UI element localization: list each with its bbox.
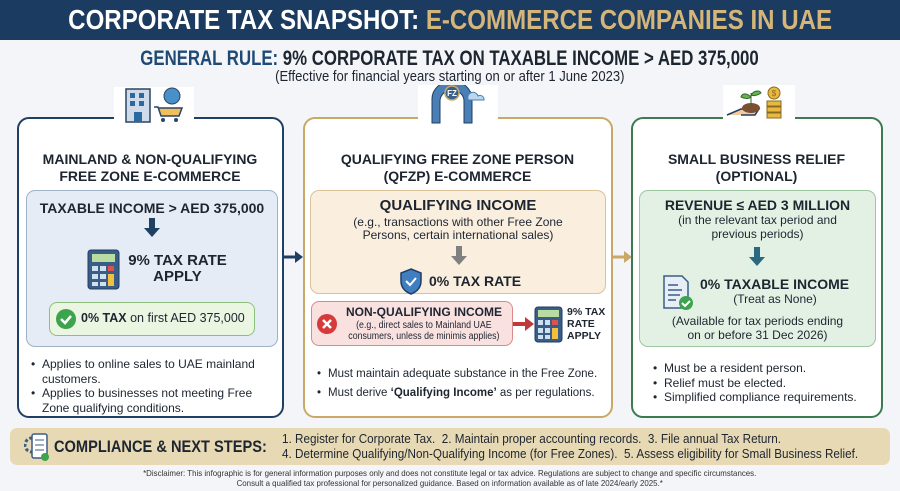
icon: calculator small + text: 9% TAX bbox=[567, 306, 605, 318]
icon: gear clipboard bbox=[24, 433, 49, 461]
panel title: (QFZP) E-COMMERCE bbox=[384, 168, 531, 184]
non-qualifying income box bbox=[311, 301, 513, 346]
panel: QFZP bbox=[303, 117, 613, 418]
bullets QFZP: Must maintain adequate substance in the Free Zone. bbox=[328, 368, 597, 380]
9% tax rate text: APPLY bbox=[153, 268, 202, 285]
revenue box: on or before 31 Dec 2026) bbox=[687, 328, 828, 342]
9% tax rate text bbox=[128, 252, 227, 285]
panel title: MAINLAND & NON-QUALIFYING bbox=[43, 151, 257, 167]
qualifying income box: QUALIFYING INCOME bbox=[380, 197, 536, 214]
revenue box: (Treat as None) bbox=[733, 292, 817, 306]
header bar: CORPORATE TAX SNAPSHOT: E-COMMERCE COMPANIES IN UAE bbox=[68, 4, 832, 35]
revenue box: REVENUE ≤ AED 3 MILLION bbox=[665, 197, 850, 213]
icon: building and cart bbox=[114, 87, 194, 123]
bullets SBR: Simplified compliance requirements. bbox=[664, 390, 857, 404]
qualifying income box: (e.g., transactions with other Free Zone bbox=[353, 215, 563, 229]
qualifying income box bbox=[310, 190, 606, 294]
taxable income box: TAXABLE INCOME > AED 375,000 bbox=[40, 200, 264, 216]
revenue box: previous periods) bbox=[711, 226, 804, 240]
bullets SBR bbox=[654, 361, 857, 404]
arrow down bbox=[144, 218, 160, 237]
bullets QFZP bbox=[317, 368, 597, 399]
icon: document check bbox=[663, 275, 693, 310]
qualifying income box: Persons, certain international sales) bbox=[363, 228, 553, 242]
non-qualifying income box: NON-QUALIFYING INCOME bbox=[346, 305, 502, 319]
disclaimer: Consult a qualified tax professional for personalized guidance. Based on information available as of late 2024/early 2025.* bbox=[237, 478, 663, 488]
panel title bbox=[668, 151, 845, 184]
taxable income box bbox=[26, 190, 278, 347]
arrow down grey bbox=[451, 246, 467, 265]
non-qualifying income box: (e.g., direct sales to Mainland UAE bbox=[356, 320, 492, 331]
icon: calculator small + text: RATE bbox=[567, 318, 595, 330]
0% tax pill: 0% TAX on first AED 375,000 bbox=[81, 311, 245, 325]
general rule heading: GENERAL RULE: 9% CORPORATE TAX ON TAXABLE INCOME > AED 375,000 bbox=[141, 47, 759, 70]
9% tax rate text: 9% TAX RATE bbox=[128, 252, 227, 269]
bullets mainland: Applies to businesses not meeting Free Zone qualifying conditions. bbox=[42, 386, 252, 414]
compliance bar: COMPLIANCE & NEXT STEPS: bbox=[54, 437, 267, 456]
panel title: SMALL BUSINESS RELIEF bbox=[668, 151, 845, 167]
subtitle: (Effective for financial years starting on or after 1 June 2023) bbox=[275, 68, 625, 85]
icon: shield bbox=[400, 268, 422, 295]
bullets mainland bbox=[32, 357, 255, 414]
disclaimer: *Disclaimer: This infographic is for general information purposes only and does not constitute legal or tax advice. Regulations are subject to change and specific circumstances. bbox=[143, 468, 757, 478]
arrow: panel2 to panel3 bbox=[613, 251, 631, 263]
bullets mainland: Applies to online sales to UAE mainland customers. bbox=[42, 357, 255, 386]
revenue box: 0% TAXABLE INCOME bbox=[700, 276, 849, 292]
panel title bbox=[341, 151, 574, 184]
icon: calculator bbox=[88, 250, 120, 290]
revenue box: (Available for tax periods ending bbox=[672, 314, 843, 328]
compliance bar: 1. Register for Corporate Tax. 2. Maintain proper accounting records. 3. File annual Tax Return. bbox=[282, 431, 781, 446]
icon: hand with plant and coins bbox=[723, 85, 795, 119]
header bar bbox=[0, 0, 900, 40]
panel title: (OPTIONAL) bbox=[716, 168, 797, 184]
panel title bbox=[43, 151, 257, 184]
bullets QFZP: Must derive ‘Qualifying Income’ as per regulations. bbox=[328, 387, 595, 399]
icon: calculator small + text: APPLY bbox=[567, 330, 601, 342]
non-qualifying income box: consumers, unless de minimis applies) bbox=[348, 331, 500, 342]
icon: calculator small + text bbox=[534, 306, 606, 342]
revenue box: (in the relevant tax period and bbox=[678, 213, 837, 227]
disclaimer bbox=[143, 468, 757, 488]
icon: hand with plant and coins: $ bbox=[772, 89, 777, 98]
arrow red bbox=[513, 317, 534, 331]
compliance bar bbox=[10, 428, 890, 465]
panel: small business relief bbox=[631, 117, 883, 418]
bullets SBR: Must be a resident person. bbox=[664, 361, 806, 375]
arrow: panel1 to panel2 bbox=[284, 251, 303, 263]
icon: free zone arch: FZ bbox=[447, 89, 457, 98]
0% tax pill bbox=[49, 302, 255, 336]
icon: free zone arch bbox=[418, 85, 498, 124]
qualifying income box: 0% TAX RATE bbox=[429, 273, 521, 289]
compliance bar: 4. Determine Qualifying/Non-Qualifying Income (for Free Zones). 5. Assess eligibility for Small Business Relief. bbox=[282, 446, 858, 461]
revenue box bbox=[639, 190, 876, 347]
bullets SBR: Relief must be elected. bbox=[664, 376, 786, 390]
panel: mainland bbox=[17, 117, 284, 418]
panel title: FREE ZONE E-COMMERCE bbox=[59, 168, 241, 184]
arrow down teal bbox=[749, 247, 765, 266]
panel title: QUALIFYING FREE ZONE PERSON bbox=[341, 151, 574, 167]
